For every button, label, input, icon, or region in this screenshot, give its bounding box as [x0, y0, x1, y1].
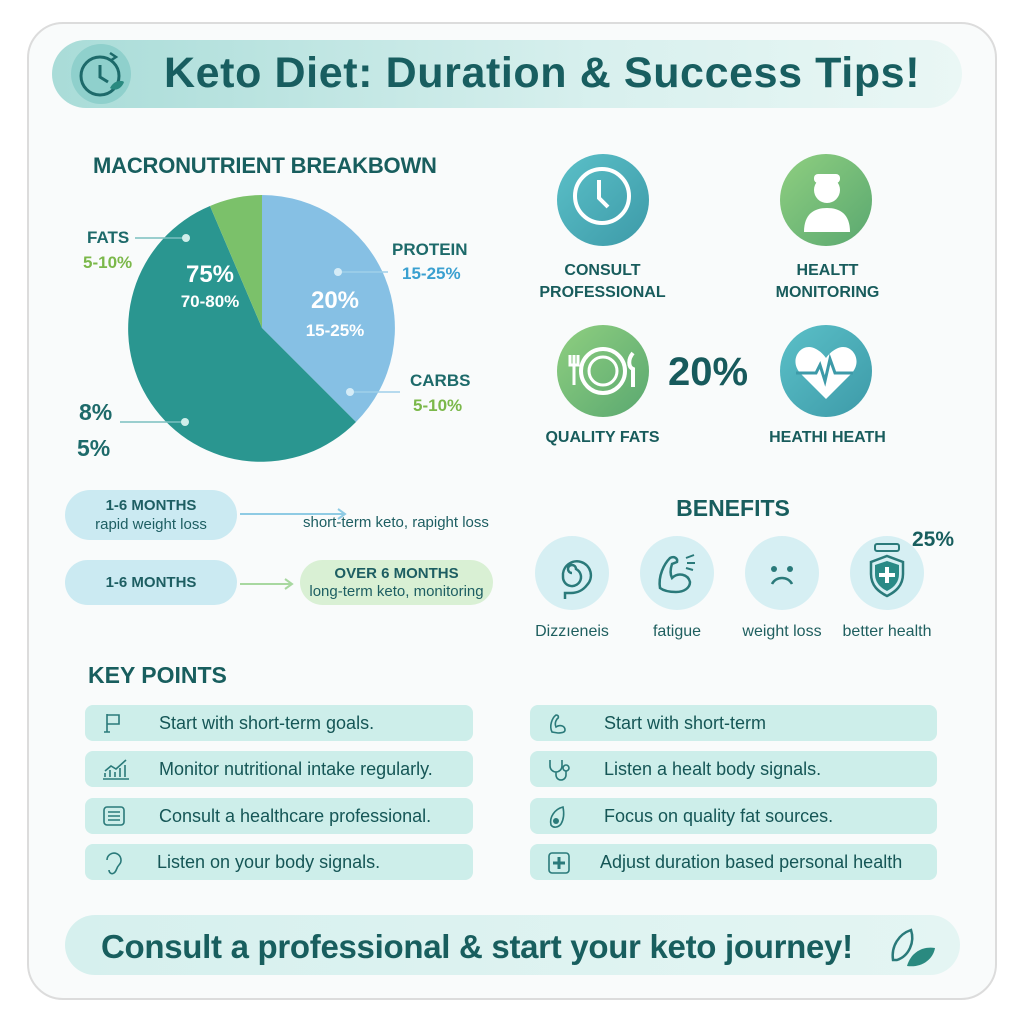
pill: 1-6 months rapid: rapid weight loss [95, 516, 207, 533]
key points list: Listen on your body signals. [157, 852, 380, 872]
arrow [240, 508, 346, 520]
key points list: Start with short-term goals. [159, 712, 374, 732]
pie chart: 15-25% [306, 321, 364, 340]
footer banner [65, 915, 960, 975]
pie chart: 75% [186, 261, 234, 288]
icon: shield [850, 536, 924, 610]
heading: macronutrient: MACRONUTRIENT BREAKBOWN [93, 153, 437, 178]
labels: fatigue [653, 623, 701, 640]
heading: key points: KEY POINTS [88, 662, 227, 688]
labels [535, 623, 931, 640]
key points list: Consult a healthcare professional. [159, 806, 431, 826]
pill: 1-6 months rapid: 1-6 MONTHS [106, 497, 196, 514]
key points list: Focus on quality fat sources. [604, 806, 833, 826]
label: quality fats: QUALITY FATS [545, 429, 660, 446]
icon: clock [71, 44, 131, 104]
key points list: Monitor nutritional intake regularly. [159, 758, 433, 778]
pill: 1-6 months: 1-6 MONTHS [106, 574, 196, 591]
icon: heart [780, 325, 872, 417]
label: consult professional [539, 262, 666, 301]
icon: clock circle [557, 154, 649, 246]
pie chart: 5% [77, 435, 110, 461]
stat: 20%: 20% [668, 350, 748, 394]
pill: over 6 months [300, 560, 493, 605]
key points list: Adjust duration based personal health [600, 852, 902, 872]
label: consult professional: PROFESSIONAL [539, 284, 666, 301]
label: heathi heath: HEATHI HEATH [769, 429, 886, 446]
pie chart: 20% [311, 287, 359, 314]
stat: 25%: 25% [912, 528, 954, 551]
label: healtt monitoring [776, 262, 879, 301]
pie chart: 70-80% [181, 292, 239, 311]
text: short-term: short-term keto, rapight loss [303, 514, 489, 531]
label: healtt monitoring: MONITORING [776, 284, 879, 301]
label: healtt monitoring: HEALTT [797, 262, 858, 279]
icon: spiral [535, 536, 609, 610]
labels: weight loss [742, 623, 822, 640]
pill: over 6 months: long-term keto, monitoring [309, 583, 484, 600]
benefits [535, 495, 954, 640]
icon: sad face [745, 536, 819, 610]
timeline [65, 490, 493, 605]
pie chart: FATS [87, 228, 129, 247]
label: consult professional: CONSULT [564, 262, 641, 279]
pie chart: 15-25% [402, 264, 461, 283]
key points list [85, 705, 937, 880]
icon: doctor [780, 154, 872, 246]
pie chart: 8% [79, 399, 112, 425]
key points list: Start with short-term [604, 712, 766, 732]
pie chart: 5-10% [413, 396, 462, 415]
pie chart: PROTEIN [392, 240, 468, 259]
icon: muscle [640, 536, 714, 610]
footer text: Consult a professional & start your keto journey! [101, 928, 853, 965]
icon: leaves [891, 928, 935, 966]
labels: better health [843, 623, 931, 640]
pie chart: 5-10% [83, 253, 132, 272]
pill: over 6 months: OVER 6 MONTHS [334, 565, 459, 582]
pie chart [77, 195, 470, 462]
arrow [240, 578, 294, 590]
labels: Dizzıeneis [535, 623, 609, 640]
pill: 1-6 months rapid [65, 490, 237, 540]
pie chart: CARBS [410, 371, 470, 390]
title: Keto Diet: Duration & Success Tips! [164, 49, 920, 97]
heading: benefits: BENEFITS [676, 495, 790, 521]
icon grid [539, 154, 886, 446]
key points list: Listen a healt body signals. [604, 758, 821, 778]
title bar [52, 40, 962, 108]
pill: 1-6 months [65, 560, 237, 605]
icon: plate [557, 325, 649, 417]
